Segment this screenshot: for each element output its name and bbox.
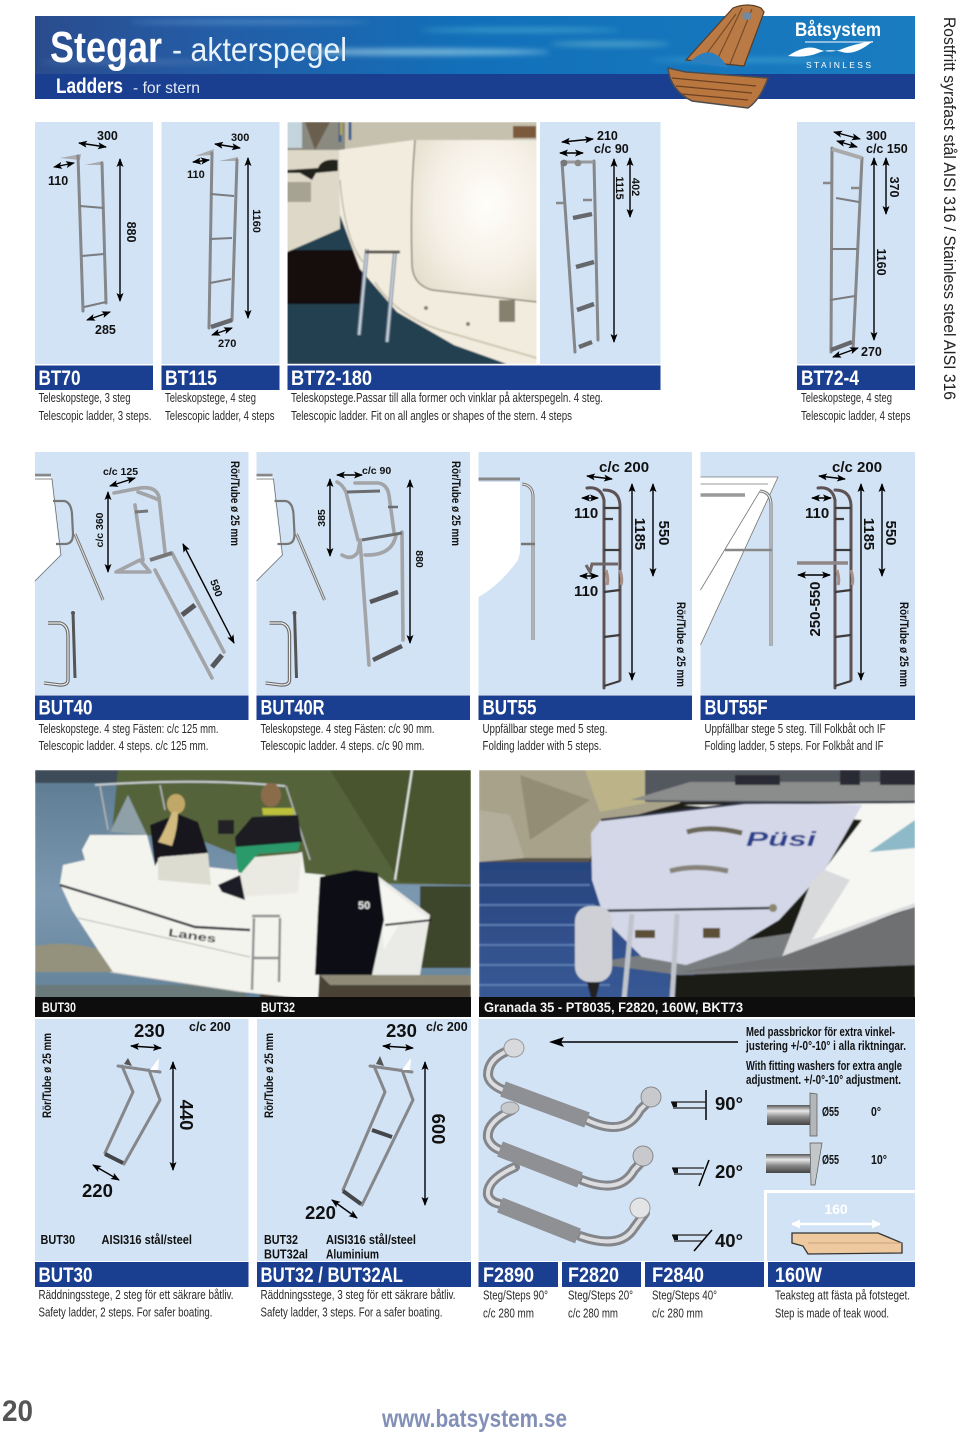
dimensions BT115: 300 [231, 132, 249, 144]
material list BUT30: BUT30 [40, 1233, 75, 1247]
caption BT70: Telescopic ladder, 3 steps. [38, 409, 152, 423]
photo: motorboat with people [35, 770, 471, 1017]
dimensions BUT40R: Rör/Tube ø 25 mm [449, 461, 463, 546]
dimensions BUT32: Rör/Tube ø 25 mm [262, 1033, 276, 1118]
angle 90: 90° [715, 1093, 743, 1114]
logo: Båtsystem Stainless [788, 20, 881, 70]
fitting 0 degrees [767, 1093, 881, 1136]
material list BUT32: BUT32al [264, 1248, 308, 1262]
dimensions BUT55: c/c 200 [599, 459, 649, 476]
caption BT72-4: Teleskopstege, 4 steg [801, 391, 892, 405]
dimensions BUT55F [798, 459, 911, 687]
caption BT115 [165, 391, 274, 423]
ladder BUT40R [337, 482, 403, 665]
product bar BUT32: BUT32 / BUT32AL [260, 1263, 403, 1287]
subtitle: Ladders [56, 75, 123, 98]
dimensions BUT30: 220 [82, 1180, 113, 1201]
dimensions BUT30: 230 [134, 1020, 165, 1041]
material list BUT32: AISI316 stål/steel [326, 1233, 416, 1247]
material list BUT32 [264, 1233, 416, 1262]
boat stern sketch [35, 475, 103, 685]
caption F2840 [652, 1288, 717, 1320]
caption F2820: Steg/Steps 20° [568, 1288, 633, 1302]
caption BUT40 [38, 722, 218, 753]
material list BUT30: AISI316 stål/steel [102, 1233, 192, 1247]
fitting 0 degrees: 0° [871, 1105, 881, 1119]
caption BUT30: Räddningsstege, 2 steg för ett säkrare båtliv. [38, 1288, 234, 1302]
dimensions BUT40R: c/c 90 [362, 465, 391, 477]
caption BT72-180 [291, 391, 603, 423]
product bar BT72-180 [288, 366, 660, 390]
caption BUT30: Safety ladder, 2 steps. For safer boating. [38, 1306, 212, 1320]
angle 90 [671, 1090, 743, 1120]
arrow head [549, 1037, 564, 1047]
angle 40 [672, 1230, 743, 1251]
dimensions BT70 [48, 129, 138, 337]
photo caption strip: BUT30 [42, 1000, 76, 1015]
note: washers: adjustment. +/-0°-10° adjustment. [746, 1073, 901, 1087]
caption F2890 [483, 1288, 548, 1320]
caption BUT55: Folding ladder with 5 steps. [482, 739, 602, 753]
dimensions BUT55F: 110 [805, 505, 829, 522]
dimensions BT72-4: c/c 150 [866, 142, 908, 156]
dimensions BT72-4: 270 [861, 345, 882, 359]
ladder BT70 [60, 154, 106, 311]
product bar BT115 [162, 366, 280, 390]
dimensions BT72-180: 402 [629, 178, 641, 196]
dimensions BUT55F: 1185 [860, 518, 877, 550]
dimensions BUT40: 590 [207, 578, 225, 599]
panel: BUT32 [257, 1019, 471, 1262]
dimensions BT115 [187, 132, 262, 350]
caption BT70: Teleskopstege, 3 steg [38, 391, 131, 405]
ladder BUT55F [797, 488, 853, 688]
dimensions BUT40R: 880 [413, 550, 425, 568]
dimensions BT72-4 [833, 129, 908, 359]
dimensions BUT32: 220 [305, 1202, 336, 1223]
panel: BT115 [162, 122, 280, 364]
caption F2820: c/c 280 mm [568, 1306, 618, 1320]
dimensions BUT32: 600 [428, 1114, 449, 1144]
product bar BUT55: BUT55 [482, 696, 537, 720]
dimensions BT115: 110 [187, 169, 205, 181]
dimensions BT72-180: c/c 90 [594, 142, 629, 156]
dimensions BUT55 [574, 459, 688, 687]
dimensions BUT40 [94, 461, 242, 643]
product bar BT72-4: BT72-4 [801, 366, 859, 390]
ladder BT72-4 [823, 148, 862, 352]
product bar BUT40 [35, 696, 248, 720]
panel: BUT40R [256, 452, 470, 695]
ladder BUT30 [105, 1058, 160, 1164]
photo caption strip: BUT32 [261, 1000, 295, 1015]
dimensions BUT30: Rör/Tube ø 25 mm [40, 1033, 54, 1118]
dimensions BT115: 1160 [250, 209, 262, 233]
caption 160W: Step is made of teak wood. [775, 1306, 889, 1320]
dimensions BUT55: 110 [574, 505, 598, 522]
caption F2820 [568, 1288, 633, 1320]
boat stern sketch [256, 475, 324, 685]
teak step: 160 [824, 1201, 848, 1217]
arrow to step [556, 1041, 738, 1043]
dimensions BUT40R: 385 [316, 509, 328, 527]
photo caption strip [35, 997, 915, 1017]
panel: BUT55F [700, 452, 915, 695]
ladder BUT32 [343, 1056, 413, 1205]
product bar 160W [768, 1262, 915, 1287]
caption BUT40R: Teleskopstege. 4 steg Fästen: c/c 90 mm. [260, 722, 434, 736]
product bar BUT30 [35, 1262, 248, 1287]
caption BUT32: Safety ladder, 3 steps. For a safer boating. [260, 1306, 442, 1320]
caption BUT40R: Telescopic ladder. 4 steps. c/c 90 mm. [260, 739, 424, 753]
panel: BUT40 [35, 452, 248, 695]
note: washers [745, 1025, 906, 1087]
boat sketch [700, 477, 778, 646]
product bar F2890: F2890 [483, 1263, 534, 1287]
dimensions BT72-180 [560, 129, 641, 342]
ladder BUT40 [114, 488, 224, 678]
ladder BUT55 [586, 488, 622, 688]
fitting 10 degrees: Ø55 [822, 1153, 839, 1167]
caption BUT55F [704, 722, 886, 753]
dimensions BUT40: c/c 360 [94, 512, 106, 548]
caption 160W [775, 1288, 910, 1320]
dimensions BUT55F: 250-550 [807, 581, 824, 637]
note: washers: With fitting washers for extra angle [746, 1059, 902, 1073]
teak step [766, 1192, 915, 1261]
caption BUT55 [482, 722, 608, 753]
ladder BT115 [195, 149, 238, 328]
logo: Båtsystem Stainless: STAINLESS [806, 60, 871, 70]
step F2890 [488, 1039, 661, 1127]
dimensions BT72-4: 370 [887, 177, 901, 197]
caption F2840: Steg/Steps 40° [652, 1288, 717, 1302]
caption BUT55: Uppfällbar stege med 5 steg. [482, 722, 608, 736]
caption BT72-180: Telescopic ladder. Fit on all angles or shapes of the stern. 4 steps [291, 409, 572, 423]
dimensions BUT55: Rör/Tube ø 25 mm [674, 602, 688, 687]
product bar BUT55F: BUT55F [704, 696, 768, 720]
dimensions BT70: 110 [48, 174, 68, 188]
photo: motorboat with people: Lanes [168, 927, 217, 946]
panel: BUT30 [35, 1019, 248, 1261]
product bar BUT55F [700, 696, 915, 720]
dimensions BUT40: c/c 125 [103, 466, 138, 478]
angle 20: 20° [715, 1161, 743, 1182]
dimensions BUT30 [40, 1020, 231, 1201]
photo: sailboat hull with step [479, 770, 915, 1017]
dimensions BUT40R [316, 461, 463, 643]
dimensions BUT55F: 550 [882, 520, 899, 546]
caption F2890: Steg/Steps 90° [483, 1288, 548, 1302]
caption BT115: Teleskopstege, 4 steg [165, 391, 256, 405]
website: www.batsystem.se [381, 1405, 567, 1433]
dimensions BT72-4: 1160 [874, 248, 888, 276]
step F2820 [488, 1102, 653, 1186]
caption BT72-4 [801, 391, 910, 423]
product bar 160W: 160W [775, 1263, 823, 1287]
side text: Rostfritt syrafast stål AISI 316 / Stainless steel AISI 316 [940, 17, 959, 400]
product bar F2840 [645, 1262, 764, 1287]
caption BUT32 [260, 1288, 456, 1320]
dimensions BUT32: c/c 200 [426, 1020, 468, 1034]
photo: sailboat hull with step: Püsi [746, 829, 817, 851]
fitting 0 degrees: Ø55 [822, 1105, 839, 1119]
panel: BT72-4 [797, 122, 915, 364]
dimensions BUT55: 1185 [631, 518, 648, 550]
dimensions BUT30: 440 [176, 1100, 197, 1130]
caption 160W: Teaksteg att fästa på fotsteget. [775, 1288, 910, 1302]
caption BUT55F: Uppfällbar stege 5 steg. Till Folkbåt och IF [704, 722, 886, 736]
material list BUT32: Aluminium [326, 1248, 379, 1262]
caption BUT32: Räddningsstege, 3 steg för ett säkrare båtliv. [260, 1288, 456, 1302]
photo: motorboat with people: 50 [358, 900, 370, 912]
angle 40: 40° [715, 1230, 743, 1251]
dimensions BT72-4: 300 [866, 129, 887, 143]
dimensions BUT55: 110 [574, 583, 598, 600]
product bar F2840: F2840 [652, 1263, 704, 1287]
subtitle suffix: - for stern [133, 80, 200, 97]
page number: 20 [2, 1395, 33, 1428]
panel: BT72-180 drawing [540, 122, 660, 364]
dimensions BT72-180: 1115 [613, 176, 625, 200]
dimensions BUT32 [262, 1020, 468, 1223]
dimensions BT72-180: 210 [597, 129, 618, 143]
panel: BT70 [35, 122, 153, 364]
product bar BUT40R [256, 696, 470, 720]
dimensions BUT30: c/c 200 [189, 1020, 231, 1034]
panel: BUT55 [478, 452, 692, 695]
photo caption strip: Granada 35 - PT8035, F2820, 160W, BKT73 [484, 1000, 743, 1015]
product bar BUT55 [478, 696, 692, 720]
note: washers: Med passbrickor för extra vinkel- [746, 1025, 895, 1039]
title suffix: - akterspegel [172, 31, 347, 68]
product bar BT70 [35, 366, 153, 390]
title: Stegar [50, 23, 162, 72]
product bar BT72-180: BT72-180 [291, 366, 372, 390]
dimensions BT70: 880 [124, 222, 138, 242]
caption BUT40R [260, 722, 434, 753]
boat sketch [478, 479, 535, 640]
caption BT70 [38, 391, 152, 423]
product bar BT70: BT70 [38, 366, 81, 390]
dimensions BUT55: 550 [655, 520, 672, 546]
caption F2840: c/c 280 mm [652, 1306, 703, 1320]
caption BUT55F: Folding ladder, 5 steps. For Folkbåt and IF [704, 739, 884, 753]
product bar BT72-4 [797, 366, 915, 390]
product bar BUT40R: BUT40R [260, 696, 325, 720]
dimensions BUT32: 230 [386, 1020, 417, 1041]
caption BUT30 [38, 1288, 234, 1320]
dimensions BUT40: Rör/Tube ø 25 mm [228, 461, 242, 546]
caption BUT40: Telescopic ladder. 4 steps. c/c 125 mm. [38, 739, 208, 753]
dimensions BT115: 270 [218, 338, 236, 350]
material list BUT32: BUT32 [264, 1233, 298, 1247]
photo: boat stern with ladder [287, 122, 537, 364]
product bar BUT30: BUT30 [38, 1263, 93, 1287]
dimensions BUT55F: Rör/Tube ø 25 mm [897, 602, 911, 687]
ladder BT72-180 [556, 160, 598, 352]
product bar BT115: BT115 [165, 366, 217, 390]
panel: steps [478, 1019, 915, 1261]
fitting 10 degrees [766, 1143, 887, 1185]
fitting 10 degrees: 10° [871, 1153, 887, 1167]
product bar BUT40: BUT40 [38, 696, 93, 720]
step F2840 [488, 1167, 650, 1241]
caption BUT40: Teleskopstege. 4 steg Fästen: c/c 125 mm. [38, 722, 218, 736]
logo: Båtsystem Stainless: Båtsystem [795, 20, 881, 41]
note: washers: justering +/-0°-10° i alla riktningar. [745, 1039, 906, 1053]
material list BUT30 [40, 1233, 192, 1247]
caption F2890: c/c 280 mm [483, 1306, 534, 1320]
product bar F2820: F2820 [568, 1263, 619, 1287]
dimensions BUT55F: c/c 200 [832, 459, 882, 476]
caption BT72-4: Telescopic ladder, 4 steps [801, 409, 910, 423]
caption BT72-180: Teleskopstege.Passar till alla former och vinklar på akterspegeln. 4 steg. [291, 391, 603, 405]
dimensions BT70: 285 [95, 323, 116, 337]
caption BT115: Telescopic ladder, 4 steps [165, 409, 274, 423]
icon: teak ladder [668, 5, 768, 108]
dimensions BT70: 300 [97, 129, 118, 143]
header banner [35, 16, 915, 99]
angle 20 [672, 1160, 743, 1186]
